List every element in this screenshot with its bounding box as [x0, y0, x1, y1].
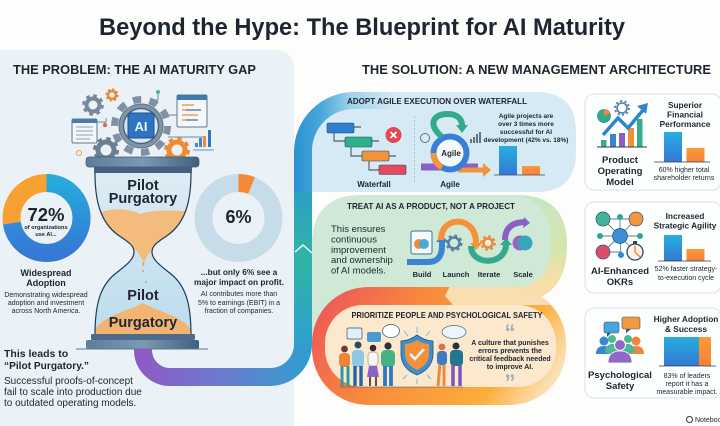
text: major impact on profit: ...but only 6% see a: [201, 267, 278, 277]
text: continuous improvement: [331, 224, 393, 276]
text: major impact on profit: major impact on profit.: [194, 277, 284, 287]
icon: OKR network: [596, 212, 643, 260]
card: product operating model: [585, 94, 720, 190]
chart: financial performance: Superior: [668, 100, 703, 110]
text: continuous improvement: continuous: [331, 234, 377, 246]
text: safety name: Psychological: [588, 370, 652, 381]
text: culture quote: errors prevents the: [478, 348, 542, 355]
panel: adopt agile execution: [294, 92, 576, 192]
icon: product lifecycle ribbon: Scale: [513, 270, 533, 279]
text: culture quote: A culture that punishes: [471, 340, 549, 347]
icon: hourglass: [76, 157, 208, 349]
icon: AI gears cluster: [72, 89, 214, 162]
text: culture quote: “: [504, 320, 516, 345]
title: Beyond the Hype: The Blueprint for AI Maturity: [99, 14, 626, 41]
icon: people group: [339, 324, 466, 387]
icon: waterfall gantt: [327, 123, 406, 189]
card: AI-enhanced OKRs: [585, 202, 720, 293]
text: culture quote: critical feedback needed: [469, 356, 551, 363]
icon: product lifecycle ribbon: Build: [413, 270, 432, 279]
chart: strategic agility: Strategic Agility: [654, 220, 717, 230]
icon: agile loop: [414, 114, 491, 189]
text: culture quote: [469, 320, 551, 395]
text: widespread adoption: Adoption: [26, 278, 66, 288]
icon: hourglass: Pilot: [127, 288, 159, 304]
icon: AI gears cluster: AI: [134, 119, 148, 134]
chart: 72% donut: use AI...: [35, 232, 57, 238]
chart: financial performance: shareholder returns: [654, 175, 715, 182]
text: culture quote: ”: [504, 370, 516, 395]
panel: treat AI as a product: [312, 195, 567, 346]
text: widespread adoption: [4, 268, 88, 315]
panel: the problem: [0, 50, 294, 426]
chart: higher adoption: & Success: [665, 324, 707, 334]
icon: team with speech bubbles: [596, 317, 644, 363]
text: pilot purgatory callout: Successful proofs-of-concept: [4, 376, 133, 387]
heading: the solution: THE SOLUTION: A NEW MANAGEMENT ARCHITECTURE: [362, 62, 711, 77]
text: model name: Product: [602, 155, 639, 166]
text: model name: [598, 155, 643, 188]
chart: higher adoption: 83% of leaders: [664, 373, 711, 380]
chart: higher adoption: report it has a: [666, 381, 709, 388]
chart: 6% donut: 6%: [225, 207, 252, 227]
text: continuous improvement: and ownership: [331, 255, 393, 266]
icon: product lifecycle ribbon: Iterate: [478, 270, 500, 279]
watermark: [686, 416, 720, 424]
chart: agile success bars: [484, 113, 568, 175]
text: OKR name: [591, 266, 649, 288]
chart: higher adoption: measurable impact.: [656, 389, 718, 396]
text: pilot purgatory callout: to outdated operating models.: [4, 398, 136, 409]
text: model name: Operating: [598, 166, 643, 177]
chart: 72% donut: 72%: [27, 204, 65, 225]
card: psychological safety: [585, 308, 720, 398]
icon: hourglass: Purgatory: [109, 315, 177, 331]
text: OKR name: AI-Enhanced: [591, 266, 649, 277]
text: pilot purgatory callout: fail to scale into production due: [4, 387, 142, 398]
text: culture quote: to improve AI.: [487, 364, 533, 371]
text: major impact on profit: fraction of companies.: [205, 308, 273, 315]
text: safety name: [588, 370, 652, 392]
chart: higher adoption: Higher Adoption: [654, 314, 718, 324]
text: major impact on profit: 5% to earnings (EBIT) in a: [198, 300, 280, 307]
chart: 72% donut: [12, 183, 82, 253]
arrow: connector ribbon from hourglass to solution: [143, 150, 312, 377]
icon: product lifecycle ribbon: Launch: [443, 270, 470, 279]
chart: agile success bars: over 3 times more: [498, 121, 554, 128]
chart: strategic agility: to-execution cycle: [658, 275, 714, 282]
icon: safety shield: [401, 327, 433, 384]
chart: financial performance: Financial: [667, 110, 703, 120]
text: safety name: Safety: [606, 381, 635, 392]
text: continuous improvement: improvement: [331, 245, 386, 256]
text: OKR name: OKRs: [607, 277, 633, 288]
panel: prioritize people: [312, 280, 570, 405]
text: pilot purgatory callout: This leads to: [4, 348, 68, 360]
icon: hourglass: Purgatory: [109, 191, 177, 207]
heading: the problem: THE PROBLEM: THE AI MATURITY GAP: [13, 62, 256, 77]
icon: agile loop: Agile: [441, 149, 461, 158]
chart: strategic agility: Increased: [666, 211, 704, 221]
icon: product lifecycle ribbon: [407, 217, 533, 279]
chart: agile success bars: Agile projects are: [499, 113, 554, 120]
chart: financial performance: [654, 100, 715, 182]
heading: TREAT AI AS A PRODUCT, NOT A PROJECT: [347, 201, 516, 211]
icon: hourglass: Pilot: [127, 178, 159, 194]
chart: strategic agility: 52% faster strategy-: [655, 266, 718, 273]
heading: ADOPT AGILE EXECUTION OVER WATERFALL: [347, 96, 527, 106]
text: widespread adoption: across North America.: [12, 308, 80, 315]
chart: financial performance: 60% higher total: [659, 167, 710, 174]
chart: 6% donut: [204, 183, 274, 253]
text: major impact on profit: AI contributes more than: [201, 291, 277, 298]
text: major impact on profit: [194, 267, 284, 315]
icon: waterfall gantt: Waterfall: [357, 180, 391, 189]
icon: growth chart: [597, 101, 648, 147]
text: continuous improvement: This ensures: [331, 224, 386, 235]
chart: 72% donut: of organizations: [24, 225, 68, 231]
heading: PRIORITIZE PEOPLE AND PSYCHOLOGICAL SAFETY: [352, 310, 543, 320]
chart: higher adoption: [654, 314, 718, 396]
text: model name: Model: [606, 177, 634, 188]
text: widespread adoption: adoption and investment: [8, 300, 84, 307]
text: pilot purgatory callout: “Pilot Purgatory.”: [4, 360, 89, 372]
text: pilot purgatory callout: [4, 348, 142, 409]
text: widespread adoption: Demonstrating widespread: [4, 292, 88, 299]
text: widespread adoption: Widespread: [21, 268, 71, 278]
chart: financial performance: Performance: [660, 119, 711, 129]
chart: agile success bars: development (42% vs. 18%): [484, 137, 568, 144]
text: continuous improvement: of AI models.: [331, 266, 386, 276]
chart: strategic agility: [654, 211, 718, 282]
chart: agile success bars: successful for AI: [500, 129, 552, 136]
icon: agile loop: Agile: [440, 180, 460, 189]
